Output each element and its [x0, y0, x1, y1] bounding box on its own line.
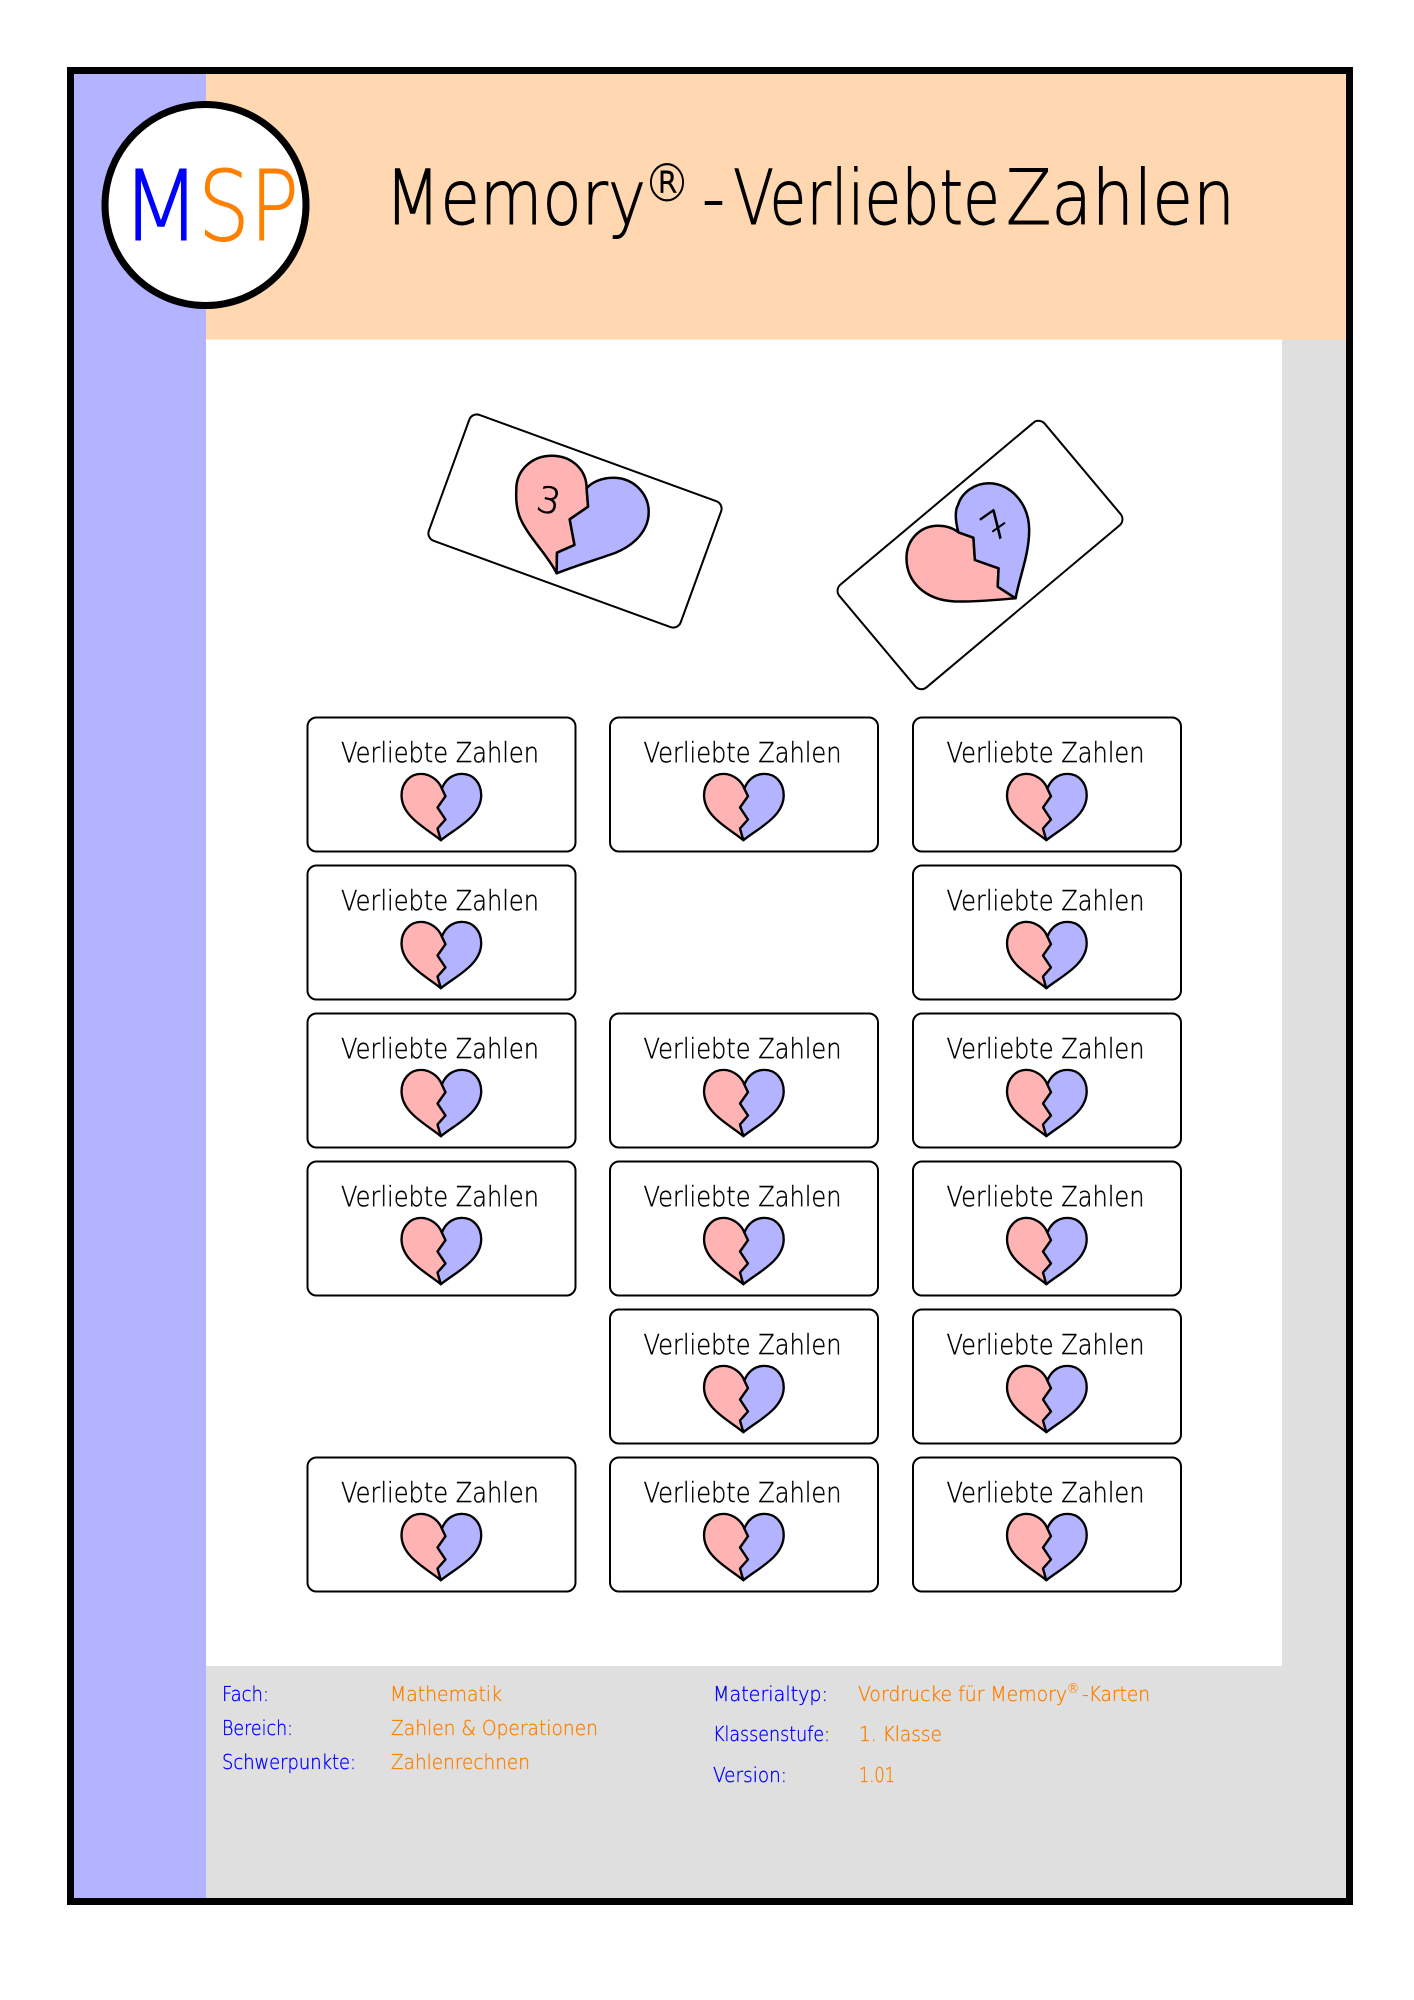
- title: [385, 153, 1235, 242]
- card row 2 column 3: Verliebte Zahlen: [946, 884, 1144, 917]
- card row 3 column 3: Verliebte Zahlen: [946, 1032, 1144, 1065]
- card row 2 column 1: Verliebte Zahlen: [341, 884, 539, 917]
- card row 1 column 1: [308, 718, 576, 852]
- title: Zahlen: [1006, 153, 1235, 242]
- card row 4 column 3: [913, 1162, 1181, 1296]
- card row 5 column 3: [913, 1310, 1181, 1444]
- card row 4 column 2: Verliebte Zahlen: [644, 1180, 842, 1213]
- footer metadata left: Bereich:: [222, 1716, 293, 1740]
- sample card: heart with number 7: 7: [973, 501, 1018, 551]
- footer metadata left: Fach:: [222, 1682, 269, 1706]
- card row 5 column 2: [610, 1310, 878, 1444]
- footer metadata right: Vordrucke für Memory: [858, 1682, 1067, 1706]
- footer metadata right: Klassenstufe:: [713, 1722, 830, 1746]
- card row 1 column 2: [610, 718, 878, 852]
- card row 3 column 1: Verliebte Zahlen: [341, 1032, 539, 1065]
- logo: MSP: SP: [198, 150, 299, 263]
- card row 3 column 2: Verliebte Zahlen: [644, 1032, 842, 1065]
- title: -: [702, 153, 725, 242]
- sample card: heart with number 3: 3: [533, 479, 564, 524]
- card row 1 column 2: Verliebte Zahlen: [644, 736, 842, 769]
- footer metadata left: Zahlenrechnen: [391, 1750, 530, 1774]
- card row 4 column 2: [610, 1162, 878, 1296]
- title: Memory: [385, 153, 646, 242]
- footer metadata right: -Karten: [1082, 1682, 1150, 1706]
- footer metadata right: 1.01: [859, 1763, 895, 1787]
- footer metadata left: Schwerpunkte:: [222, 1750, 356, 1774]
- sample card: heart with number 3: [426, 412, 724, 630]
- header band: [206, 74, 1347, 340]
- footer metadata right: Materialtyp:: [713, 1682, 828, 1706]
- card row 5 column 2: Verliebte Zahlen: [644, 1328, 842, 1361]
- logo: MSP: [105, 104, 306, 306]
- card row 1 column 3: Verliebte Zahlen: [946, 736, 1144, 769]
- card row 1 column 3: [913, 718, 1181, 852]
- card row 6 column 3: Verliebte Zahlen: [946, 1476, 1144, 1509]
- footer metadata left: [222, 1682, 598, 1774]
- card row 3 column 3: [913, 1014, 1181, 1148]
- footer metadata right: Version:: [713, 1763, 787, 1787]
- logo: MSP: M: [121, 150, 201, 263]
- footer metadata left: Mathematik: [390, 1682, 502, 1706]
- card row 5 column 3: Verliebte Zahlen: [946, 1328, 1144, 1361]
- card row 6 column 3: [913, 1458, 1181, 1592]
- card row 4 column 1: Verliebte Zahlen: [341, 1180, 539, 1213]
- card row 6 column 2: [610, 1458, 878, 1592]
- card row 3 column 2: [610, 1014, 878, 1148]
- card row 4 column 3: Verliebte Zahlen: [946, 1180, 1144, 1213]
- footer metadata right: ®: [1067, 1682, 1079, 1697]
- card row 6 column 2: Verliebte Zahlen: [644, 1476, 842, 1509]
- title: Verliebte: [733, 153, 1000, 242]
- footer metadata right: [713, 1682, 1150, 1787]
- sample card: heart with number 7: [834, 418, 1126, 692]
- card row 1 column 1: Verliebte Zahlen: [341, 736, 539, 769]
- card row 2 column 1: [308, 866, 576, 1000]
- white content panel: [206, 340, 1282, 1666]
- card row 6 column 1: Verliebte Zahlen: [341, 1476, 539, 1509]
- footer metadata left: Zahlen & Operationen: [391, 1716, 598, 1740]
- title: ®: [644, 154, 690, 214]
- card row 6 column 1: [308, 1458, 576, 1592]
- card row 3 column 1: [308, 1014, 576, 1148]
- card row 4 column 1: [308, 1162, 576, 1296]
- card row 2 column 3: [913, 866, 1181, 1000]
- footer metadata right: 1. Klasse: [859, 1722, 942, 1746]
- left blue column: [74, 74, 206, 1898]
